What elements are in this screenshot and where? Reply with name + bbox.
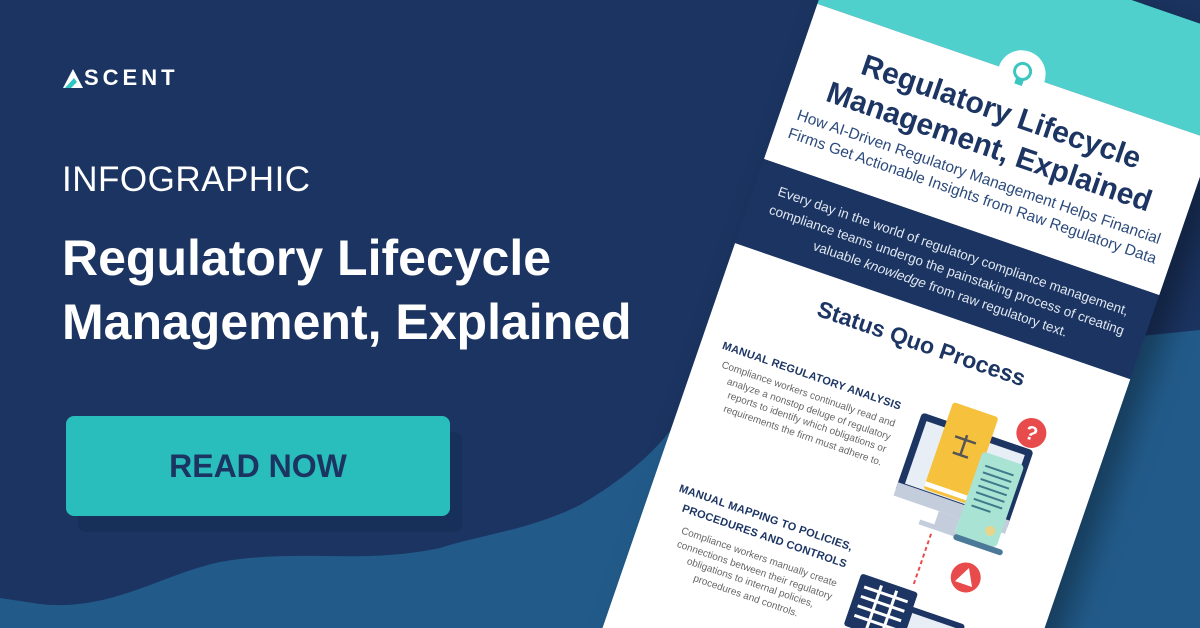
icon: lightbulb xyxy=(999,50,1046,86)
step 2 text xyxy=(677,484,851,616)
step 1 text: reports to identify which obligations or xyxy=(726,390,888,455)
step 2 text: Compliance workers manually create xyxy=(680,526,838,589)
intro band text: Every day in the world of regulatory compliance management, xyxy=(776,184,1131,318)
step 2 text: connections between their regulatory xyxy=(676,539,834,602)
title card xyxy=(764,4,1200,295)
logo xyxy=(63,69,174,88)
step 2 text: procedures and controls. xyxy=(692,573,800,619)
step 1 text: MANUAL REGULATORY ANALYSIS xyxy=(721,340,903,413)
logo: SCENT xyxy=(84,65,179,90)
intro band text: valuable knowledge from raw regulatory text. xyxy=(811,238,1069,340)
intro band text xyxy=(735,159,1159,379)
step 1 text: requirements the firm must adhere to. xyxy=(722,403,883,468)
teal header band xyxy=(817,0,1200,140)
doc title: Regulatory Lifecycle xyxy=(857,49,1145,176)
intro band text: compliance teams undergo the painstaking process of creating xyxy=(767,202,1126,338)
step 1 text: Compliance workers continually read and xyxy=(720,360,896,430)
doc subtitle: How AI-Driven Regulatory Management Helps Financial xyxy=(795,107,1163,248)
step 2 text: obligations to internal policies, xyxy=(685,556,815,610)
illustration: monitor with rulebook and question: ? xyxy=(1022,422,1040,446)
button: read now: READ NOW xyxy=(169,448,347,484)
lower card xyxy=(601,243,1130,628)
step 2 text: MANUAL MAPPING TO POLICIES, xyxy=(677,483,854,554)
step 1 text: analyze a nonstop deluge of regulatory xyxy=(726,376,892,442)
step 2 text: PROCEDURES AND CONTROLS xyxy=(680,503,848,571)
icon: logo triangle xyxy=(63,69,83,88)
infographic preview document xyxy=(602,0,1200,628)
heading: status quo process: Status Quo Process xyxy=(814,295,1029,391)
doc subtitle: Firms Get Actionable Insights from Raw Regulatory Data xyxy=(786,125,1159,268)
button: read now xyxy=(66,416,450,516)
doc title: Management, Explained xyxy=(822,76,1156,218)
step 1 text xyxy=(722,342,901,466)
title xyxy=(65,238,628,350)
title: Regulatory Lifecycle xyxy=(62,230,551,286)
illustration: monitor with rulebook and question xyxy=(844,402,1046,628)
label: infographic: INFOGRAPHIC xyxy=(62,160,311,199)
title: Management, Explained xyxy=(62,294,632,350)
